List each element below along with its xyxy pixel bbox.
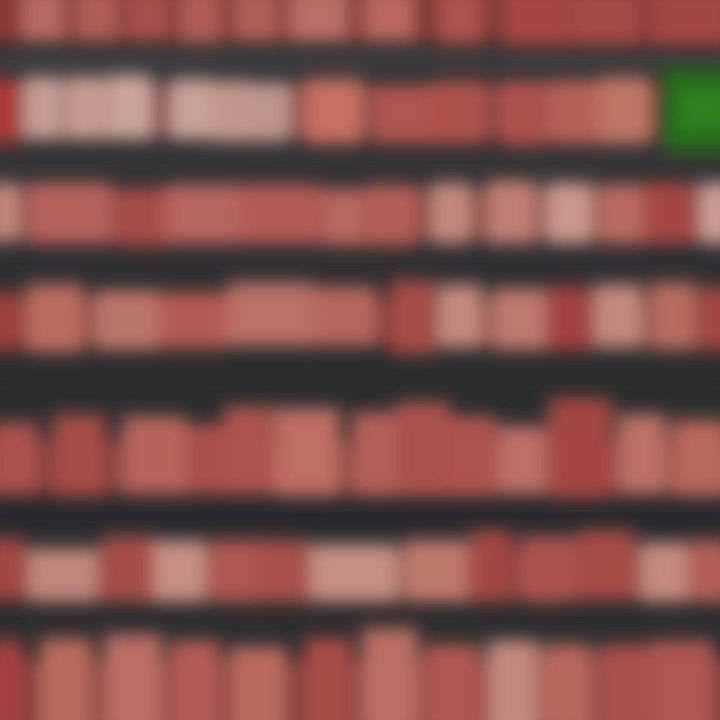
row 2 xyxy=(0,74,670,146)
dark gaps between rows xyxy=(0,52,720,624)
row 1 xyxy=(0,0,720,46)
green block xyxy=(662,68,720,152)
row 6 xyxy=(0,530,720,602)
row 3 xyxy=(0,180,720,246)
row 5 xyxy=(0,398,720,498)
row 7 xyxy=(0,628,720,720)
row 4 xyxy=(0,280,720,354)
